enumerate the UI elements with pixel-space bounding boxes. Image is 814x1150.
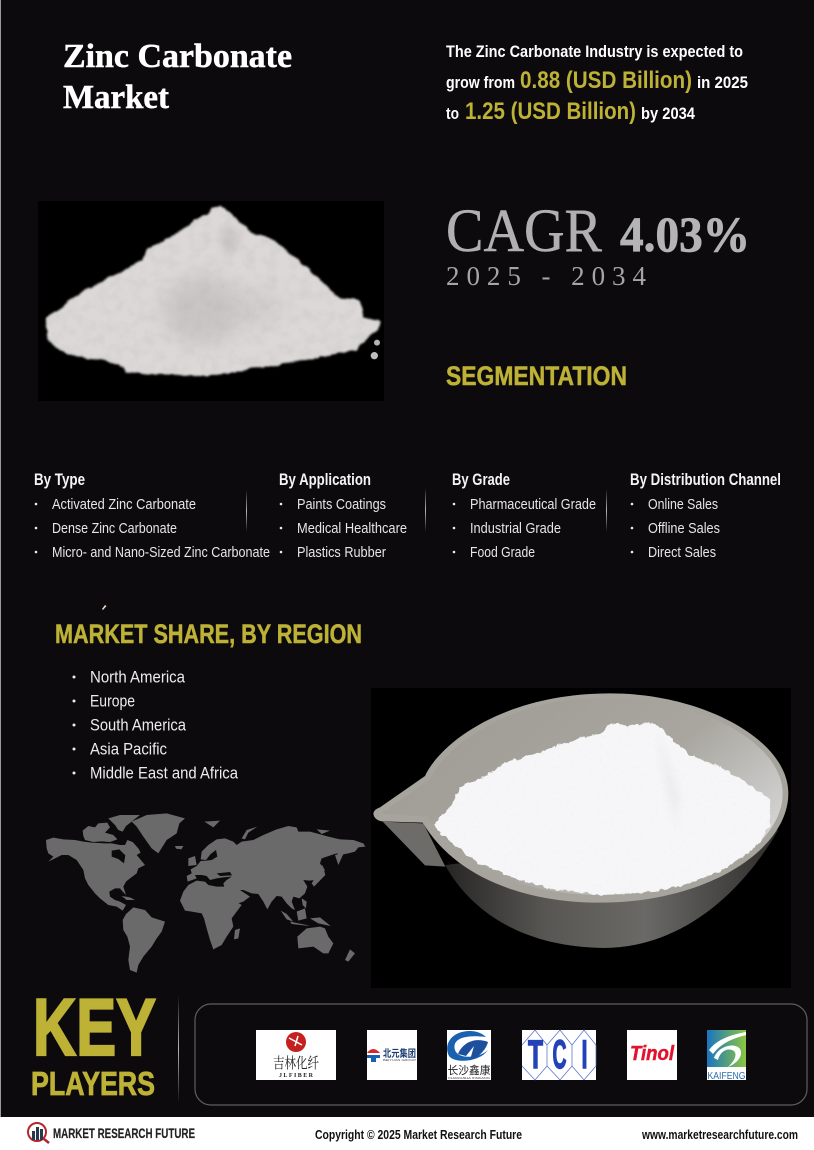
greenland bbox=[132, 813, 185, 853]
africa bbox=[180, 881, 242, 949]
svalbard bbox=[204, 821, 220, 827]
region list: South America bbox=[90, 716, 186, 734]
left edge strip bbox=[0, 0, 1, 1117]
logo: beiyuan group: BEIYUAN GROUP bbox=[383, 1058, 416, 1062]
region list: Europe bbox=[90, 692, 135, 710]
market forecast text block: in 2025 bbox=[697, 73, 748, 92]
panel: by type: Dense Zinc Carbonate bbox=[52, 520, 177, 537]
icon: market research future logo bbox=[28, 1123, 49, 1143]
panel: by type: By Type bbox=[34, 470, 85, 489]
logo: jlfiber: 吉林化纤 bbox=[273, 1052, 319, 1073]
logo: kaifeng bbox=[707, 1030, 746, 1082]
heading: key players bbox=[31, 983, 156, 1102]
south america bbox=[123, 907, 165, 973]
logo: tci bbox=[522, 1030, 596, 1080]
logo: tci: T bbox=[528, 1033, 543, 1077]
panel: by application: Paints Coatings bbox=[297, 496, 386, 513]
panel: by application: By Application bbox=[279, 470, 371, 489]
footer bar bbox=[0, 1117, 814, 1150]
region list: Asia Pacific bbox=[90, 740, 167, 758]
CAGR figure: 2025 - 2034 bbox=[446, 261, 646, 291]
british isles bbox=[188, 856, 197, 866]
logo: beiyuan group: 北元集团 bbox=[383, 1045, 416, 1060]
madagascar bbox=[234, 928, 240, 939]
CAGR figure bbox=[446, 198, 750, 291]
panel: by type bbox=[34, 470, 270, 561]
panel: by application: Medical Healthcare bbox=[297, 520, 407, 537]
bowl rim bbox=[373, 693, 788, 903]
panel: by distribution channel: Direct Sales bbox=[648, 544, 716, 561]
eurasia bbox=[187, 826, 365, 910]
bowl interior bbox=[382, 697, 783, 895]
panel: by type: Micro- and Nano-Sized Zinc Carbonate bbox=[52, 544, 270, 561]
panel: by grade: Food Grade bbox=[470, 544, 535, 561]
panel: by grade bbox=[452, 470, 596, 561]
heading: segmentation: SEGMENTATION bbox=[446, 361, 627, 391]
panel: by distribution channel: Offline Sales bbox=[648, 520, 720, 537]
logo: beiyuan group bbox=[367, 1030, 417, 1080]
panel: by grade: Pharmaceutical Grade bbox=[470, 496, 596, 513]
panel: by distribution channel: Online Sales bbox=[648, 496, 718, 513]
region list: Middle East and Africa bbox=[90, 764, 238, 782]
heading: key players: PLAYERS bbox=[31, 1065, 155, 1102]
panel: by distribution channel bbox=[630, 470, 781, 561]
australia bbox=[297, 927, 333, 953]
market forecast text block: 0.88 (USD Billion) bbox=[520, 67, 692, 94]
spout side bbox=[383, 822, 445, 867]
heading: key players: KEY bbox=[33, 983, 156, 1073]
logo: kaifeng: KAIFENG bbox=[708, 1071, 746, 1082]
logo: changsha xinkang: CHANGSHA XINKANG bbox=[448, 1076, 491, 1080]
heading: market share by region: MARKET SHARE, BY REGION bbox=[55, 619, 362, 649]
logo: tci: C bbox=[552, 1033, 566, 1077]
footer bar: Copyright © 2025 Market Research Future bbox=[315, 1127, 522, 1142]
image: bowl of powder bbox=[371, 688, 791, 988]
novaya zemlya bbox=[242, 827, 257, 839]
new zealand bbox=[345, 949, 355, 962]
powder bbox=[433, 722, 770, 895]
region list: North America bbox=[90, 668, 185, 686]
panel: by grade: By Grade bbox=[452, 470, 510, 489]
panel: by type: Activated Zinc Carbonate bbox=[52, 496, 196, 513]
title bbox=[63, 38, 292, 116]
north america bbox=[46, 838, 145, 911]
CAGR figure: 4.03% bbox=[620, 206, 750, 262]
bowl outer body bbox=[445, 830, 778, 948]
logo: tci: I bbox=[582, 1033, 588, 1077]
market forecast text block: 1.25 (USD Billion) bbox=[465, 98, 636, 125]
logo: jlfiber bbox=[256, 1030, 336, 1080]
logo: jlfiber: JLFIBER bbox=[279, 1073, 314, 1079]
panel: by grade: Industrial Grade bbox=[470, 520, 561, 537]
logo: changsha xinkang bbox=[447, 1030, 491, 1080]
market forecast text block: to bbox=[446, 104, 459, 123]
japan bbox=[312, 865, 325, 887]
market forecast text block: The Zinc Carbonate Industry is expected to bbox=[446, 42, 743, 61]
panel: by application bbox=[279, 470, 407, 561]
logo: changsha xinkang: 长沙鑫康 bbox=[448, 1062, 490, 1078]
kamchatka bbox=[335, 853, 344, 865]
caribbean islands bbox=[122, 896, 135, 900]
iceland bbox=[175, 846, 183, 849]
black sea bbox=[217, 872, 232, 876]
northern siberia island bbox=[317, 829, 330, 834]
CAGR figure: CAGR bbox=[446, 198, 602, 265]
arctic islands bbox=[83, 815, 140, 842]
world map bbox=[46, 813, 365, 973]
market forecast text block: grow from bbox=[446, 73, 515, 92]
market forecast text block: by 2034 bbox=[641, 104, 695, 123]
panel: key players logos bbox=[195, 1004, 807, 1105]
title: Market bbox=[63, 79, 170, 116]
logo: tinol bbox=[627, 1030, 677, 1080]
region list bbox=[72, 668, 238, 782]
market forecast text block bbox=[446, 42, 748, 125]
footer bar: MARKET RESEARCH FUTURE bbox=[53, 1125, 195, 1141]
southeast asia islands bbox=[281, 898, 331, 926]
image: powder pile bbox=[38, 201, 384, 401]
logo: tinol: Tinol bbox=[630, 1043, 674, 1065]
panel: by application: Plastics Rubber bbox=[297, 544, 386, 561]
title: Zinc Carbonate bbox=[63, 38, 292, 75]
